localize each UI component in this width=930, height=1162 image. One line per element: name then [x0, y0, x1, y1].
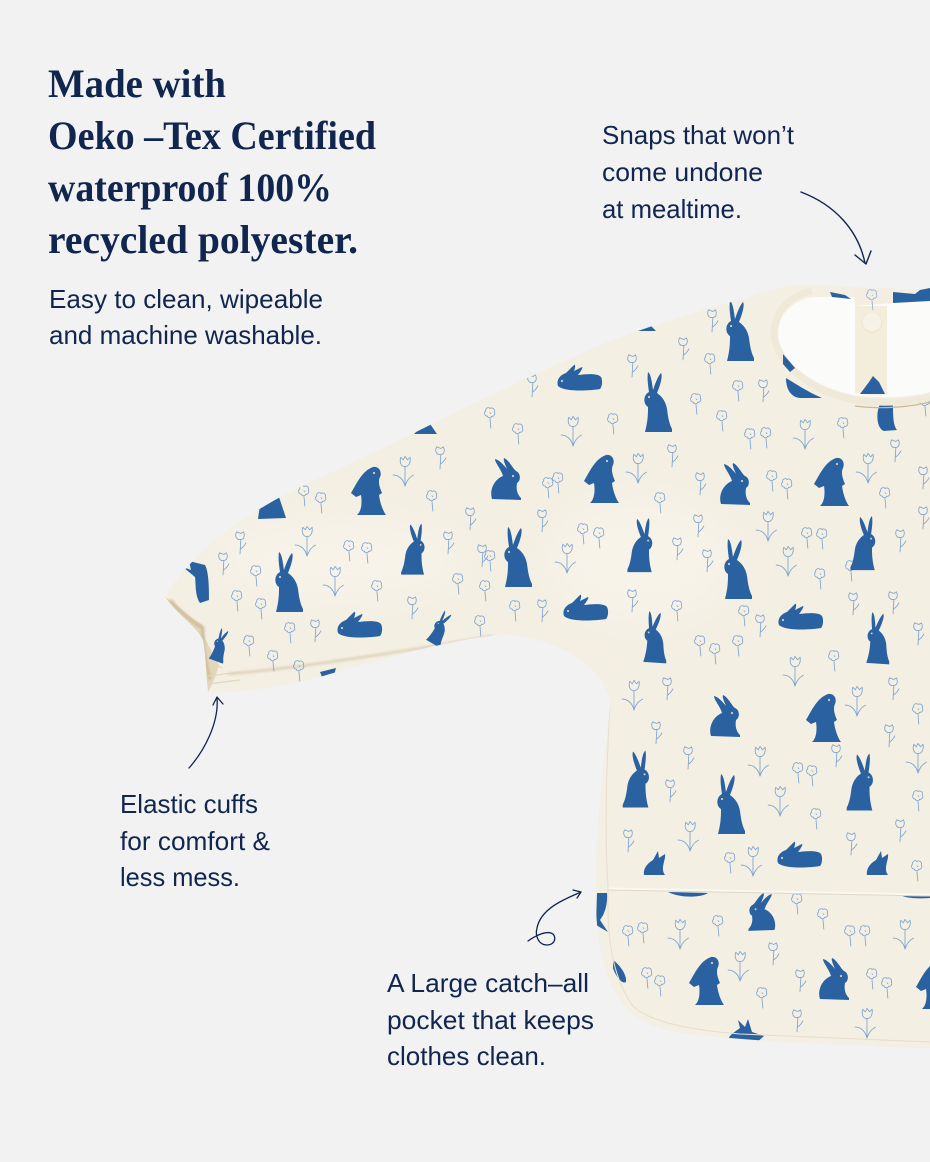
callout: pocket: pocket that keeps	[387, 1005, 594, 1035]
arrow: to cuff	[189, 697, 223, 768]
placket rabbit	[860, 376, 885, 394]
pocket fold seam	[608, 889, 930, 895]
callout: elastic cuffs: less mess.	[120, 862, 240, 892]
pocket rabbits	[596, 892, 930, 1044]
callout: pocket: clothes clean.	[387, 1041, 546, 1071]
snap button	[862, 312, 882, 334]
callout: snaps: at mealtime.	[602, 194, 742, 224]
callout: elastic cuffs	[120, 789, 270, 892]
collar binding	[774, 291, 930, 402]
elastic cuff gathers	[165, 597, 240, 692]
rabbit pattern	[183, 301, 897, 875]
subtitle text: Easy to clean, wipeable	[49, 284, 323, 314]
bib illustration	[165, 285, 930, 1060]
callout: snaps	[602, 120, 795, 224]
subtitle text	[49, 284, 323, 350]
title: recycled polyester.	[48, 217, 358, 262]
title: waterproof 100%	[48, 165, 332, 210]
title: Made with	[48, 61, 226, 106]
snap placket	[855, 306, 887, 395]
arrow: to snaps	[801, 192, 871, 264]
collar rabbits	[783, 288, 930, 398]
callout: snaps: Snaps that won’t	[602, 120, 795, 150]
callout: snaps: come undone	[602, 157, 763, 187]
arrow: to pocket	[528, 890, 581, 945]
snap tab	[853, 288, 893, 306]
subtitle text: and machine washable.	[49, 320, 322, 350]
title: Oeko –Tex Certified	[48, 113, 376, 158]
sleeve underside fold line	[228, 636, 492, 674]
neck opening	[778, 297, 930, 397]
pocket flowers	[623, 894, 914, 1038]
title	[48, 61, 376, 262]
callout: elastic cuffs: for comfort &	[120, 826, 270, 856]
flower on snap tab	[867, 290, 877, 310]
callout: elastic cuffs: Elastic cuffs	[120, 789, 258, 819]
flower pattern	[219, 310, 930, 881]
side and bottom seam	[606, 705, 930, 1042]
callout: pocket	[387, 968, 594, 1071]
pocket panel	[596, 892, 930, 1040]
soft fabric shading	[220, 500, 930, 1020]
callout: pocket: A Large catch–all	[387, 968, 589, 998]
